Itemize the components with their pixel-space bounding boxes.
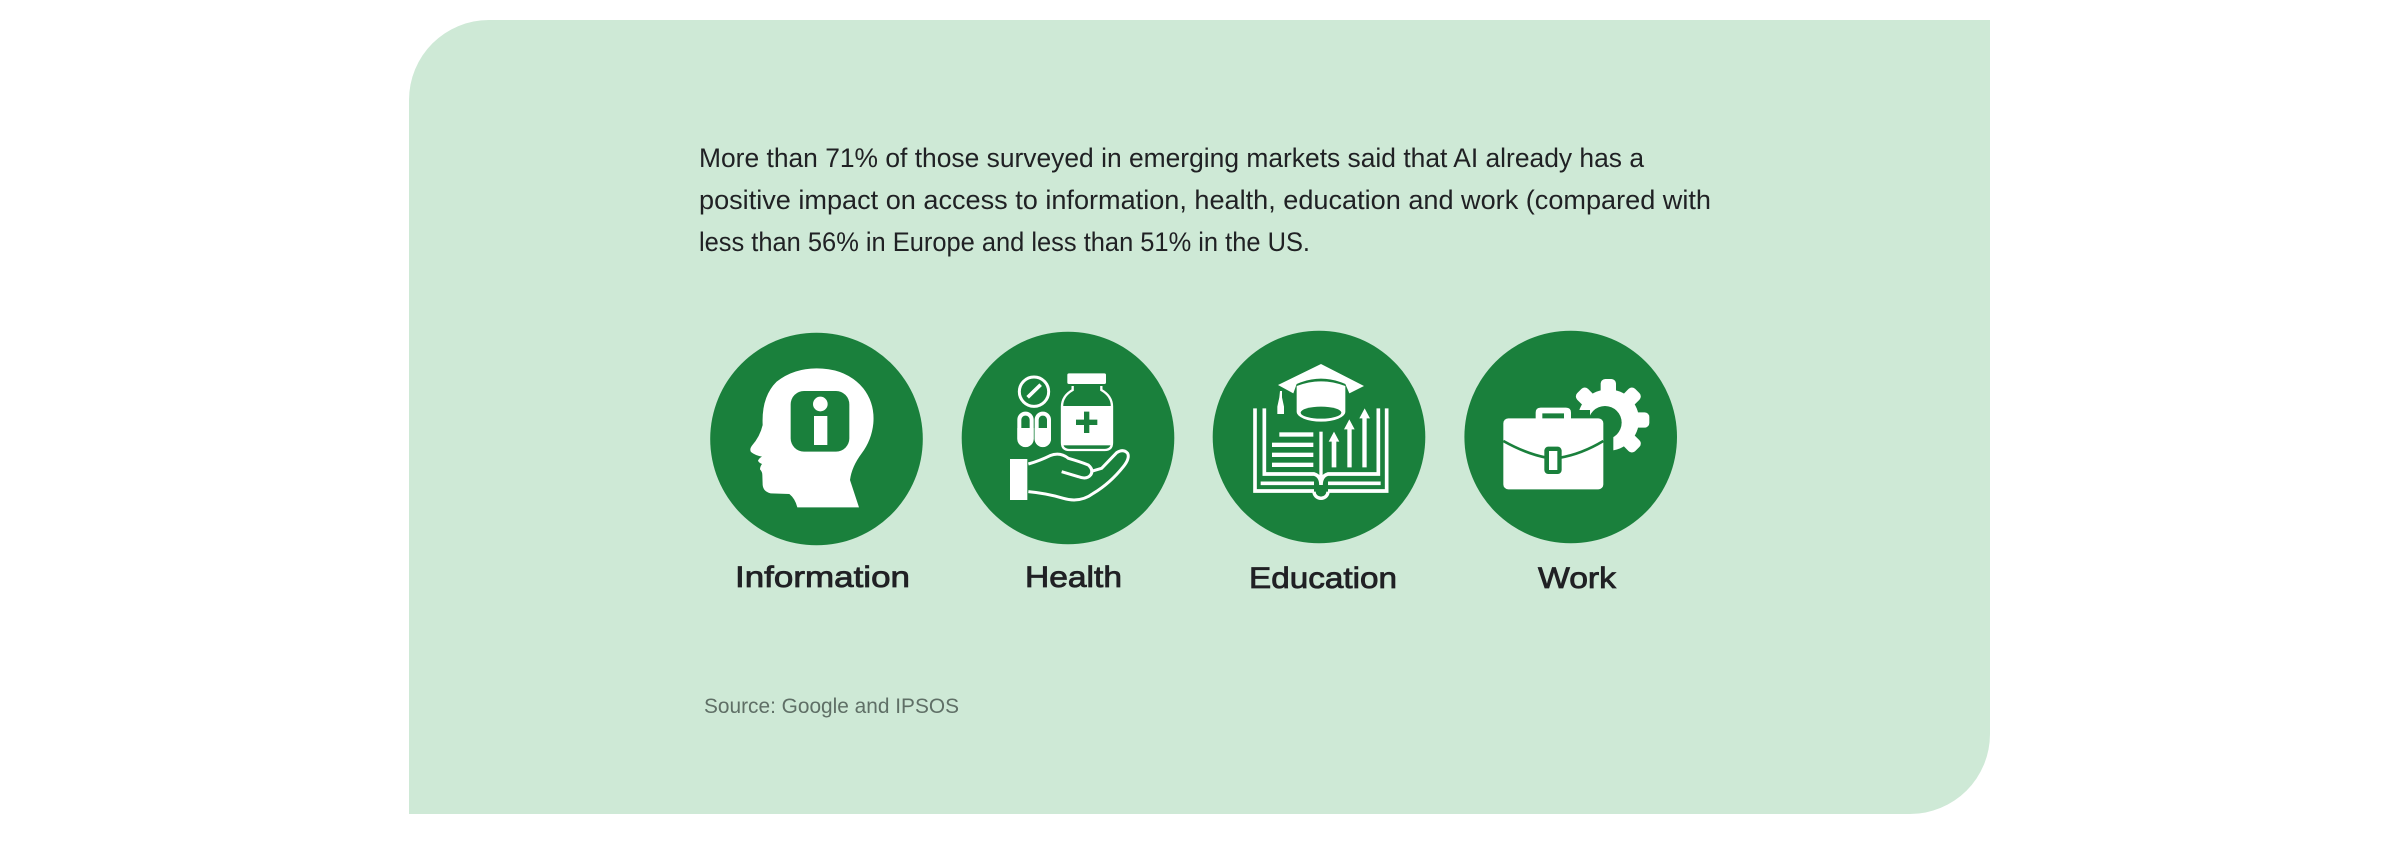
item: Information <box>710 333 923 594</box>
icon: book with graduation cap <box>1213 331 1425 543</box>
text block: intro paragraph: More than 71% of those surveyed in emerging markets said that AI already has a <box>699 143 1645 173</box>
item: Work <box>1464 331 1677 595</box>
icon: head with info symbol <box>710 333 923 545</box>
label: Work: Work <box>1538 562 1617 595</box>
source note: Source: Google and IPSOS <box>704 695 959 718</box>
label: Education: Education <box>1249 562 1397 595</box>
panel: green background card <box>409 20 1990 814</box>
item: Education <box>1213 331 1425 595</box>
icon: hand holding medicine <box>962 332 1174 544</box>
label: Information: Information <box>735 561 910 594</box>
text block: intro paragraph: positive impact on access to information, health, education and work (compared with <box>699 185 1711 215</box>
item: Health <box>962 332 1174 594</box>
text block: intro paragraph <box>699 143 1711 257</box>
icon: briefcase with gear <box>1464 331 1677 543</box>
label: Health: Health <box>1025 561 1122 594</box>
text block: intro paragraph: less than 56% in Europe and less than 51% in the US. <box>699 227 1310 257</box>
